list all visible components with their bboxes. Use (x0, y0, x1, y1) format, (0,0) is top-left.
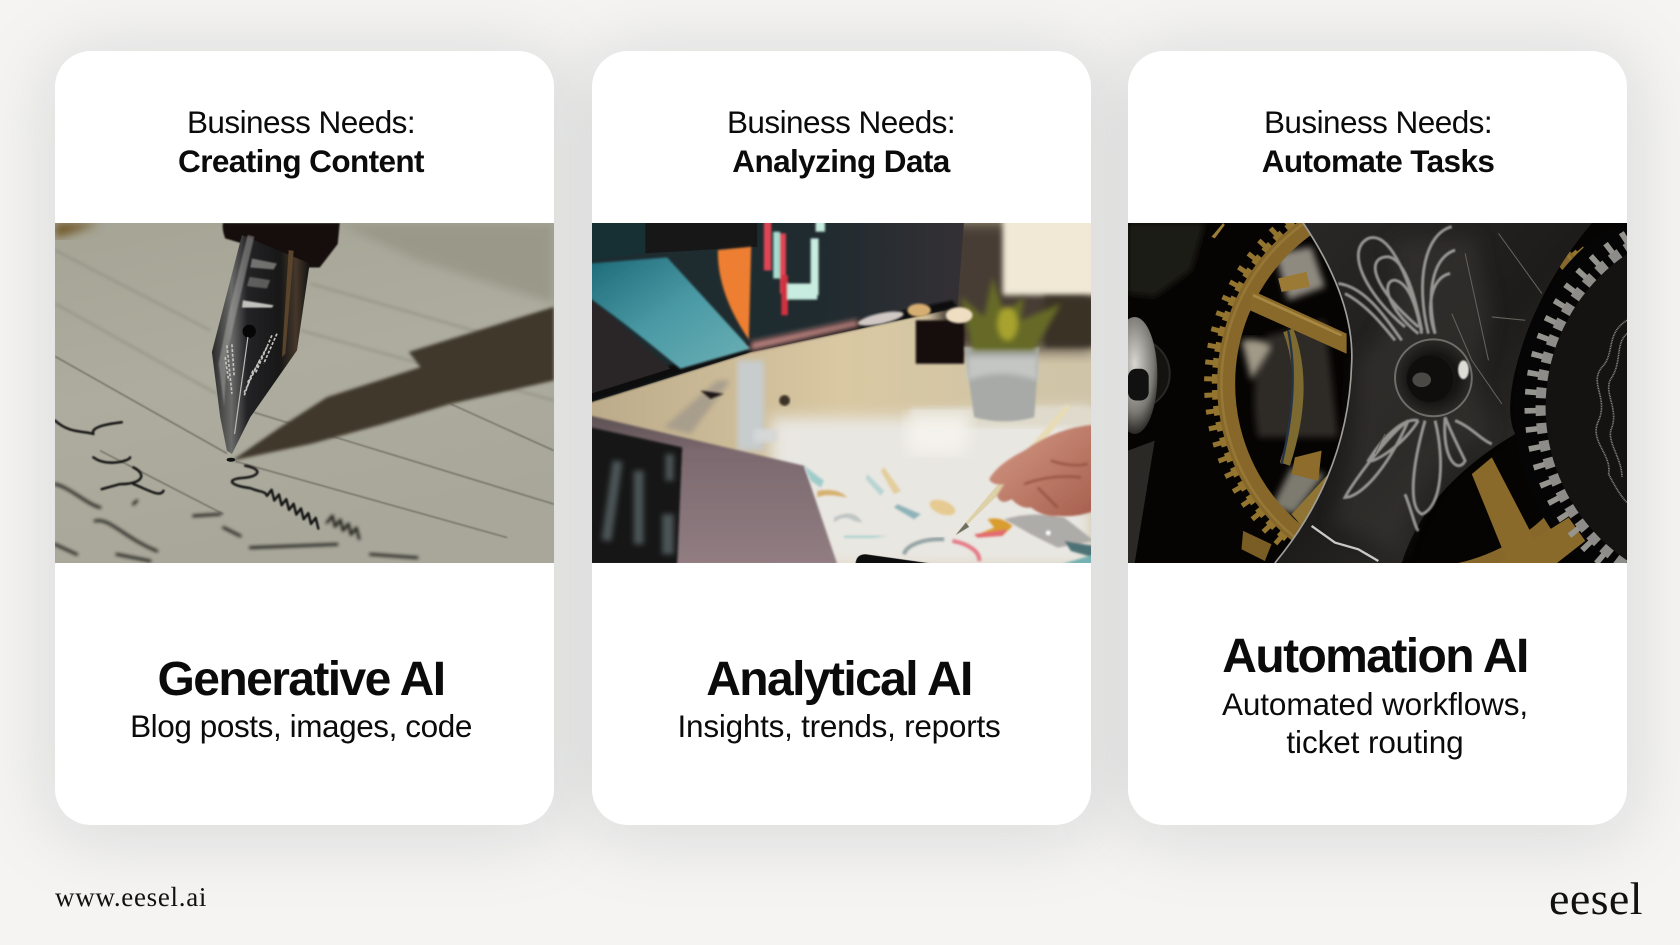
AI type description (1222, 686, 1528, 760)
heading: business need analyzing data: Analyzing Data (732, 142, 950, 178)
heading: business need creating content: Creating Content (178, 142, 424, 178)
AI type name: Automation AI (1222, 630, 1528, 683)
heading: business need automate tasks: Automate Tasks (1262, 142, 1494, 178)
AI type description: Automated workflows, (1222, 686, 1528, 722)
image: fountain pen writing on lined paper (55, 223, 554, 563)
panel: automate tasks / automation AI (1128, 51, 1627, 825)
AI type description: ticket routing (1286, 724, 1464, 760)
panel: analyzing data / analytical AI (592, 51, 1091, 825)
AI type name: Analytical AI (706, 653, 972, 706)
panel: creating content / generative AI (55, 51, 554, 825)
heading: business need analyzing data: Business Needs: (727, 104, 955, 140)
heading: business need analyzing data (727, 104, 955, 178)
AI type description: Insights, trends, reports (678, 708, 1000, 744)
AI type name: Generative AI (158, 653, 444, 706)
heading: business need creating content: Business Needs: (187, 104, 415, 140)
heading: business need creating content (178, 104, 424, 178)
image: close-up of brass and steel clockwork gears (1128, 223, 1627, 563)
eesel logo wordmark: eesel (1549, 873, 1643, 924)
heading: business need automate tasks: Business Needs: (1264, 104, 1492, 140)
heading: business need automate tasks (1262, 104, 1494, 178)
image: data dashboards with monitor, laptop and hand with pencil (592, 223, 1622, 563)
website url: www.eesel.ai (55, 882, 207, 912)
AI type description: Blog posts, images, code (130, 708, 472, 744)
